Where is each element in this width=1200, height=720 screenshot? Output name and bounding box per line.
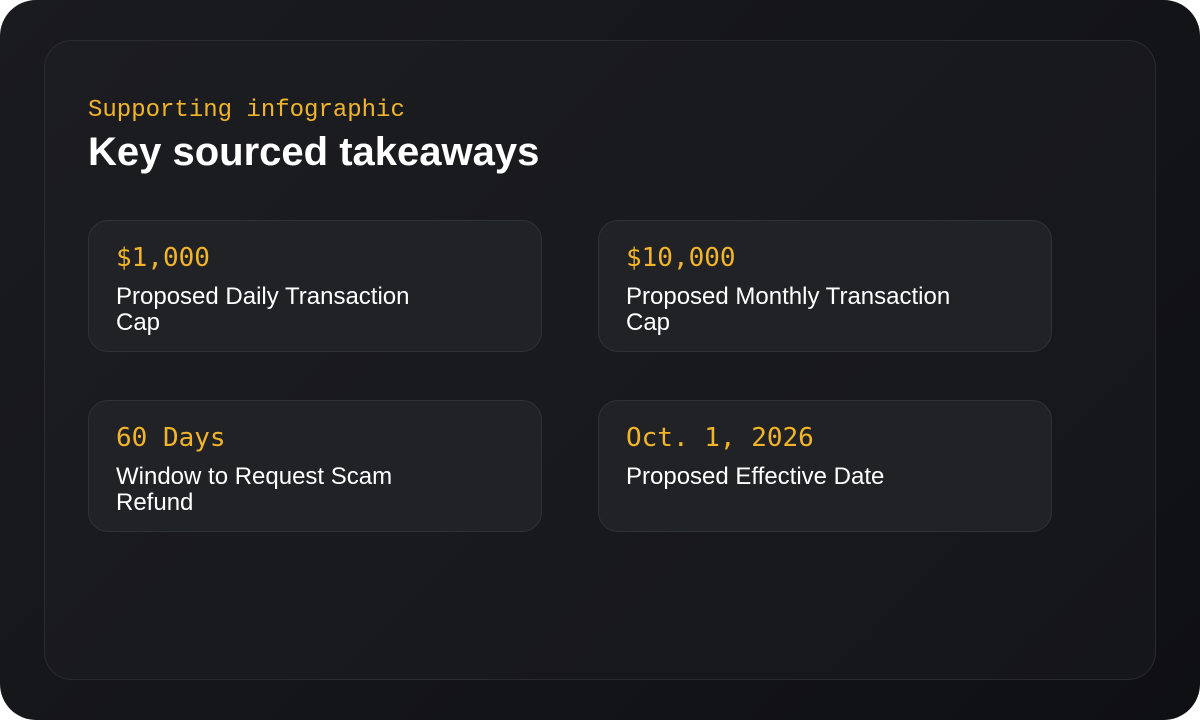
card: refund window: Window to Request Scam Refund (116, 463, 392, 516)
card: monthly cap: Proposed Monthly Transaction Cap (626, 283, 950, 336)
card: effective date (598, 400, 1052, 532)
subtitle: Supporting infographic (88, 97, 405, 124)
title: Key sourced takeaways (88, 130, 539, 174)
card: daily cap: $1,000 (116, 243, 210, 273)
card: daily cap (88, 220, 542, 352)
card: daily cap: Proposed Daily Transaction Cap (116, 283, 409, 336)
card: refund window: 60 Days (116, 423, 226, 453)
card: monthly cap: $10,000 (626, 243, 736, 273)
card: effective date: Oct. 1, 2026 (626, 423, 814, 453)
card: monthly cap (598, 220, 1052, 352)
card: refund window (88, 400, 542, 532)
card: effective date: Proposed Effective Date (626, 463, 884, 490)
